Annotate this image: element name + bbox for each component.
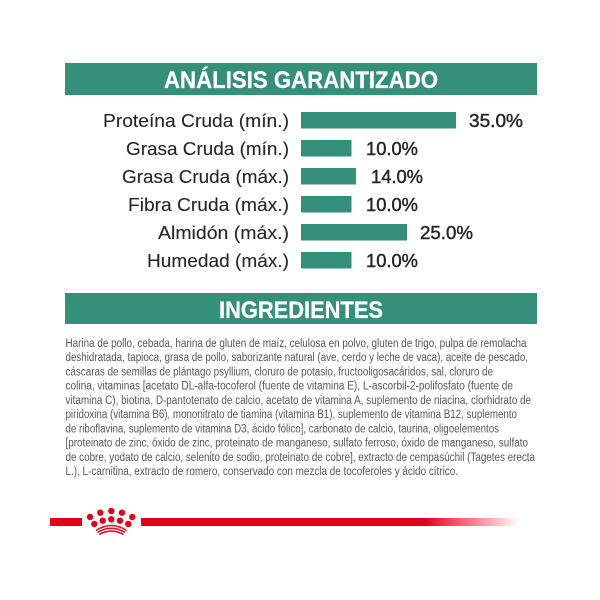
text block: ingredient list: colina, vitaminas [acetato DL-alfa-tocoferol (fuente de vitamina E), L-ascorbil-2-polifosfato (fuente de xyxy=(66,380,513,392)
row: grasa cruda máxima: Grasa Cruda (máx.) xyxy=(122,167,289,187)
footer: brand strip with crown logo xyxy=(50,508,519,534)
heading: análisis garantizado xyxy=(65,63,537,95)
heading: ingredientes: INGREDIENTES xyxy=(219,297,383,324)
row: fibra cruda: Fibra Cruda (máx.) xyxy=(128,195,289,215)
row: almidón: Almidón (máx.) xyxy=(158,223,289,243)
row: humedad xyxy=(147,251,418,271)
text block: ingredient list: Harina de pollo, cebada, harina de gluten de maíz, celulosa en polvo, gluten de trigo, pulpa de remolacha xyxy=(66,338,527,350)
row: almidón: 25.0% xyxy=(420,223,473,243)
heading: análisis garantizado: ANÁLISIS GARANTIZADO xyxy=(164,66,438,94)
row: grasa cruda máxima: 14.0% xyxy=(371,167,423,187)
panel: ingredients xyxy=(65,293,537,478)
text block: ingredient list: de riboflavina, suplemento de vitamina D3, ácido fólico], carbonato de calcio, taurina, oligoelementos xyxy=(66,423,499,435)
red line right fading xyxy=(141,518,519,526)
row: grasa cruda máxima xyxy=(122,167,423,187)
text block: ingredient list: cáscaras de semillas de plántago psyllium, cloruro de potasio, fructooligosacáridos, sal, cloruro de xyxy=(66,366,493,378)
text block: ingredient list: vitamina C), biotina, D-pantotenato de calcio, acetato de vitamina A, suplemento de niacina, clorhidrato de xyxy=(66,395,531,407)
row: grasa cruda mínima: Grasa Cruda (mín.) xyxy=(126,139,289,159)
red line left xyxy=(50,518,82,526)
row: proteína cruda: Proteína Cruda (mín.) xyxy=(103,111,289,131)
row: proteína cruda: 35.0% xyxy=(469,111,523,131)
row: humedad: 10.0% xyxy=(366,251,418,271)
text block: ingredient list: de cobre, yodato de calcio, selenito de sodio, proteinato de cobre], extracto de cempasúchil (Tagetes erecta xyxy=(66,452,536,464)
text block: ingredient list: [proteinato de zinc, óxido de zinc, proteinato de manganeso, sulfato ferroso, óxido de manganeso, sulfato xyxy=(66,438,528,450)
panel: guaranteed analysis xyxy=(65,63,537,271)
row: grasa cruda mínima xyxy=(126,139,418,159)
row: fibra cruda: 10.0% xyxy=(366,195,418,215)
row: fibra cruda xyxy=(128,195,418,215)
row: grasa cruda mínima: 10.0% xyxy=(366,139,418,159)
bar chart: nutrient percentages xyxy=(103,111,523,271)
icon: royal canin crown xyxy=(87,508,136,534)
text block: ingredient list: L.), L-carnitina, extracto de romero, conservado con mezcla de tocoferoles y ácido cítrico. xyxy=(66,466,458,478)
text block: ingredient list xyxy=(66,338,536,478)
text block: ingredient list: piridoxina (vitamina B6), mononitrato de tiamina (vitamina B1), suplemento de vitamina B12, suplemento xyxy=(66,409,517,421)
text block: ingredient list: deshidratada, tapioca, grasa de pollo, saborizante natural (ave, cerdo y leche de vaca), aceite de pescado, xyxy=(66,352,528,364)
heading: ingredientes xyxy=(65,293,537,324)
row: humedad: Humedad (máx.) xyxy=(147,251,289,271)
row: proteína cruda xyxy=(103,111,523,131)
row: almidón xyxy=(158,223,473,243)
